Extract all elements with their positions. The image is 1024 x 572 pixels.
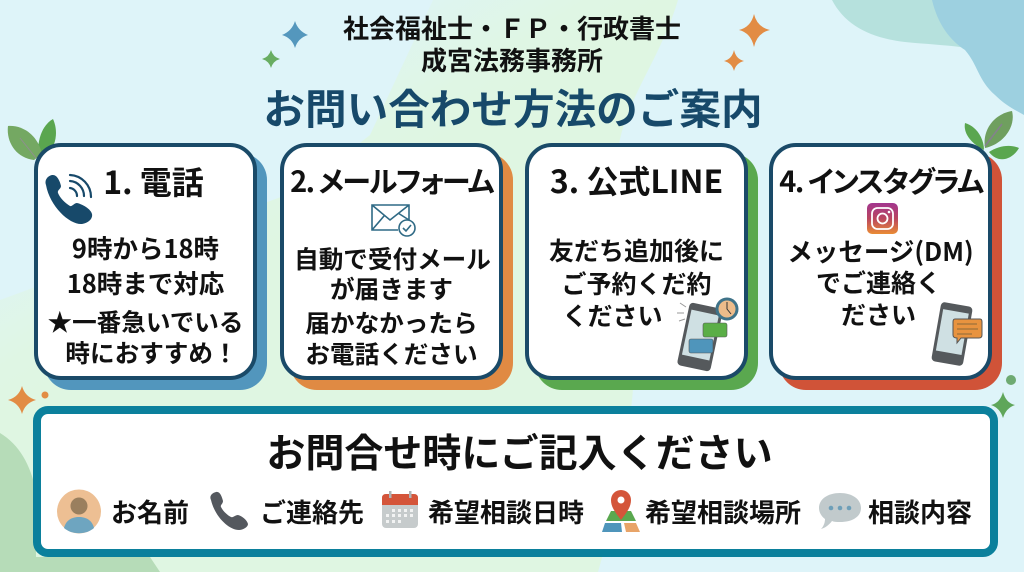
panel: 2 mail form: が届きます: [330, 270, 453, 306]
panel: 1 phone: 時におすすめ！: [65, 334, 238, 370]
icon: smartphone with message: [932, 302, 982, 366]
text: auto reply: 自動で受付メール: [294, 240, 491, 276]
icon: smartphone with chat and clock: [677, 298, 738, 372]
panel: 2 mail form: [280, 143, 513, 390]
label: preferred date: 希望相談日時: [428, 493, 584, 530]
title: お問い合わせ方法のご案内: [263, 76, 763, 136]
label: preferred place: 希望相談場所: [645, 493, 801, 530]
icon: Instagram: [867, 203, 898, 234]
item: name: [57, 490, 189, 534]
heading: Instagram: 4. インスタグラム: [779, 159, 983, 201]
panel: 3 LINE: ください: [562, 297, 662, 333]
item: consultation details: [819, 493, 972, 530]
text: hours: 9時から18時: [72, 229, 219, 266]
item: preferred date: [382, 491, 584, 530]
icon: phone: [210, 492, 248, 530]
icon: map pin: [602, 490, 640, 532]
heading: inquiry checklist: お問合せ時にご記入ください: [266, 423, 773, 479]
panel: 4 Instagram: でご連絡く: [816, 264, 941, 300]
icon: envelope with check: [371, 204, 416, 237]
panel: 1 phone: 18時まで対応: [67, 264, 224, 301]
label: consultation details: 相談内容: [868, 493, 972, 530]
panel: 4 Instagram: ださい: [841, 296, 916, 332]
organisation name line 1: 社会福祉士・ＦＰ・行政書士: [343, 9, 681, 46]
leaves: top left: [8, 119, 56, 160]
heading: LINE: 3. 公式LINE: [550, 157, 723, 203]
panel: 4 Instagram: [769, 143, 1002, 390]
label: contact: ご連絡先: [260, 493, 364, 530]
panel: inquiry checklist: [33, 406, 998, 557]
leaves: top right: [964, 111, 1019, 160]
header text: [263, 9, 763, 136]
text: Instagram instructions: メッセージ(DM): [787, 232, 974, 269]
heading: phone: 1. 電話: [103, 158, 204, 204]
icon: speech bubble: [819, 493, 861, 529]
panel: 2 mail form: お電話ください: [305, 335, 478, 371]
organisation name line 2: 成宮法務事務所: [421, 41, 603, 78]
text: recommendation: ★一番急いでいる: [47, 303, 244, 339]
item: contact: [210, 492, 364, 530]
panel: 3 LINE: ご予約くだ約: [561, 265, 712, 301]
icon: person: [57, 490, 101, 534]
panel: 3 LINE: [525, 143, 758, 390]
label: name: お名前: [111, 493, 189, 530]
panel: 1 phone: [34, 143, 267, 390]
icon: calendar: [382, 491, 418, 528]
heading: mail form: 2. メールフォーム: [290, 159, 493, 201]
icon: phone with signal: [46, 174, 92, 224]
text: LINE instructions: 友だち追加後に: [549, 232, 724, 268]
item: preferred place: [602, 490, 801, 532]
text: fallback: 届かなかったら: [305, 304, 478, 340]
